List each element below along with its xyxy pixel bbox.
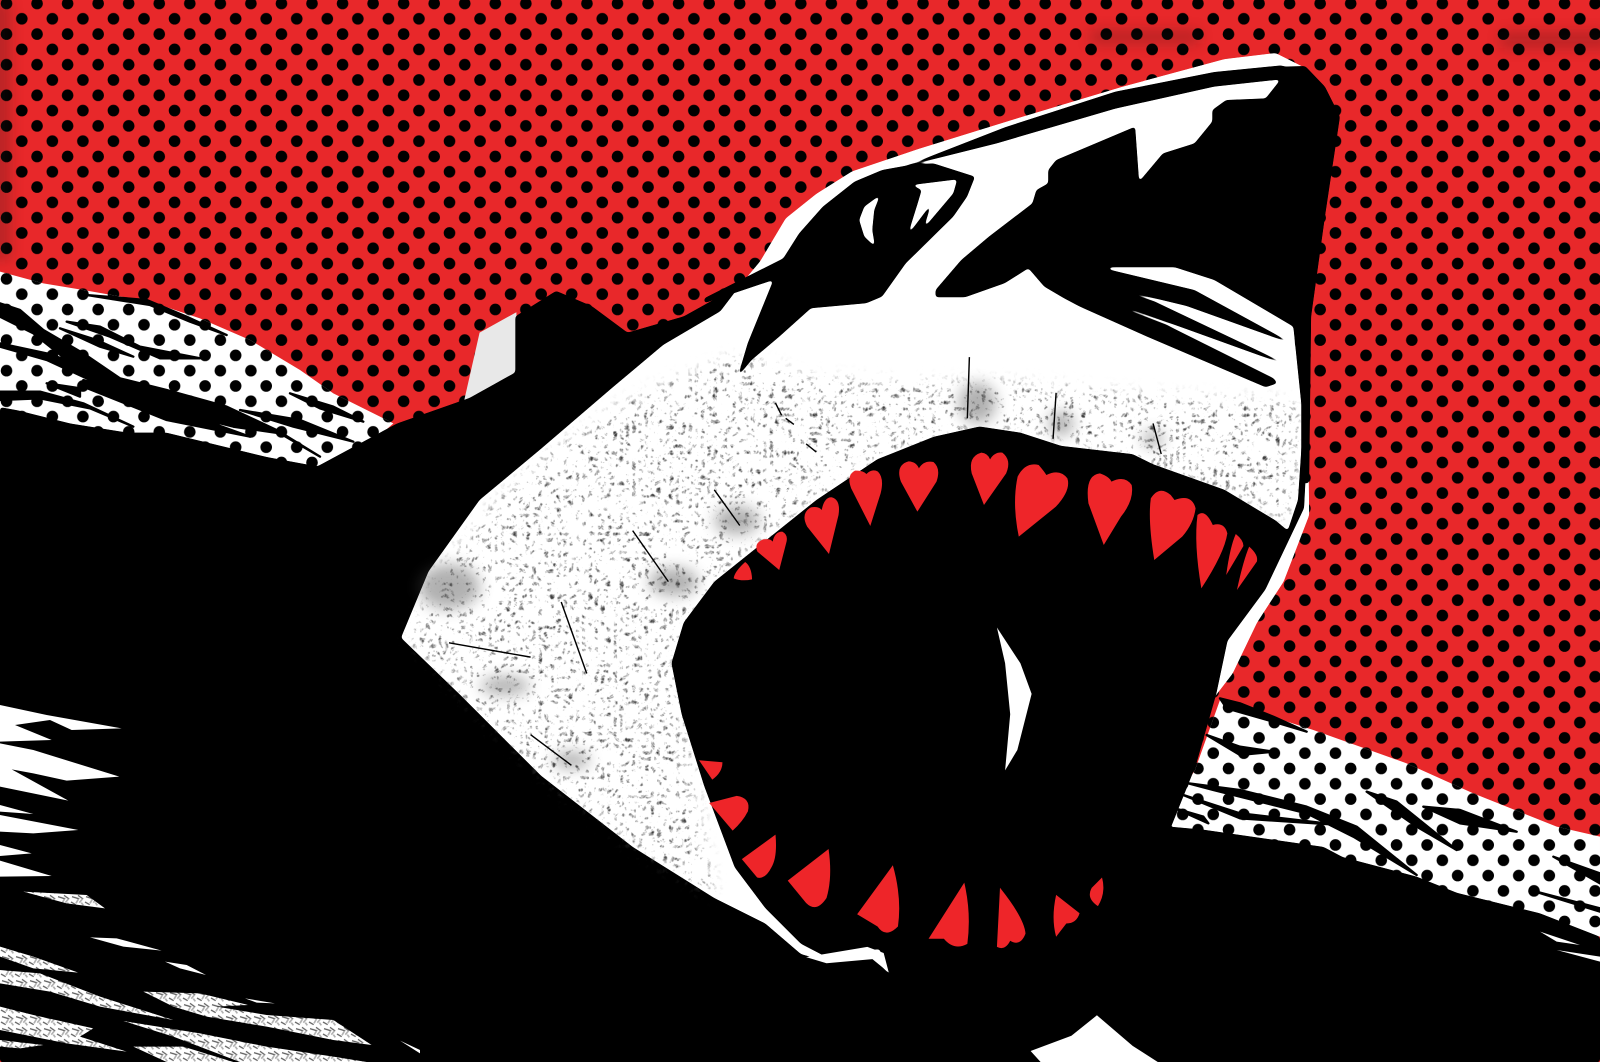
white brush streaks, lower left bbox=[0, 705, 420, 1062]
eye crescent bbox=[859, 195, 880, 247]
snout black mass bbox=[935, 66, 1340, 483]
mouth interior bbox=[671, 408, 1308, 980]
grey shading smudges bbox=[418, 383, 1163, 768]
lower heart teeth bbox=[699, 760, 1103, 948]
black speckles and scratches bbox=[449, 357, 1161, 765]
shark body silhouette bbox=[0, 265, 1600, 1062]
shark head white bbox=[401, 53, 1309, 972]
gill line two bbox=[1094, 283, 1295, 368]
tongue sliver bbox=[997, 628, 1032, 770]
halftone wave: right bbox=[1172, 697, 1600, 937]
white patch behind dorsal fin bbox=[464, 312, 520, 400]
white brush streaks, bottom centre and far right bbox=[1031, 932, 1600, 1062]
gill line three bbox=[1080, 298, 1278, 387]
snout, eye and gills bbox=[704, 65, 1340, 483]
halftone wave: upper left bbox=[0, 272, 394, 466]
gill line one bbox=[1100, 268, 1295, 345]
eye mask bbox=[704, 163, 975, 377]
jaw tip bbox=[806, 947, 889, 972]
upper heart teeth bbox=[734, 453, 1257, 590]
speckled ink texture on head bbox=[405, 352, 1301, 892]
eye highlight bbox=[908, 179, 957, 235]
top outline stripe bbox=[904, 65, 1293, 167]
